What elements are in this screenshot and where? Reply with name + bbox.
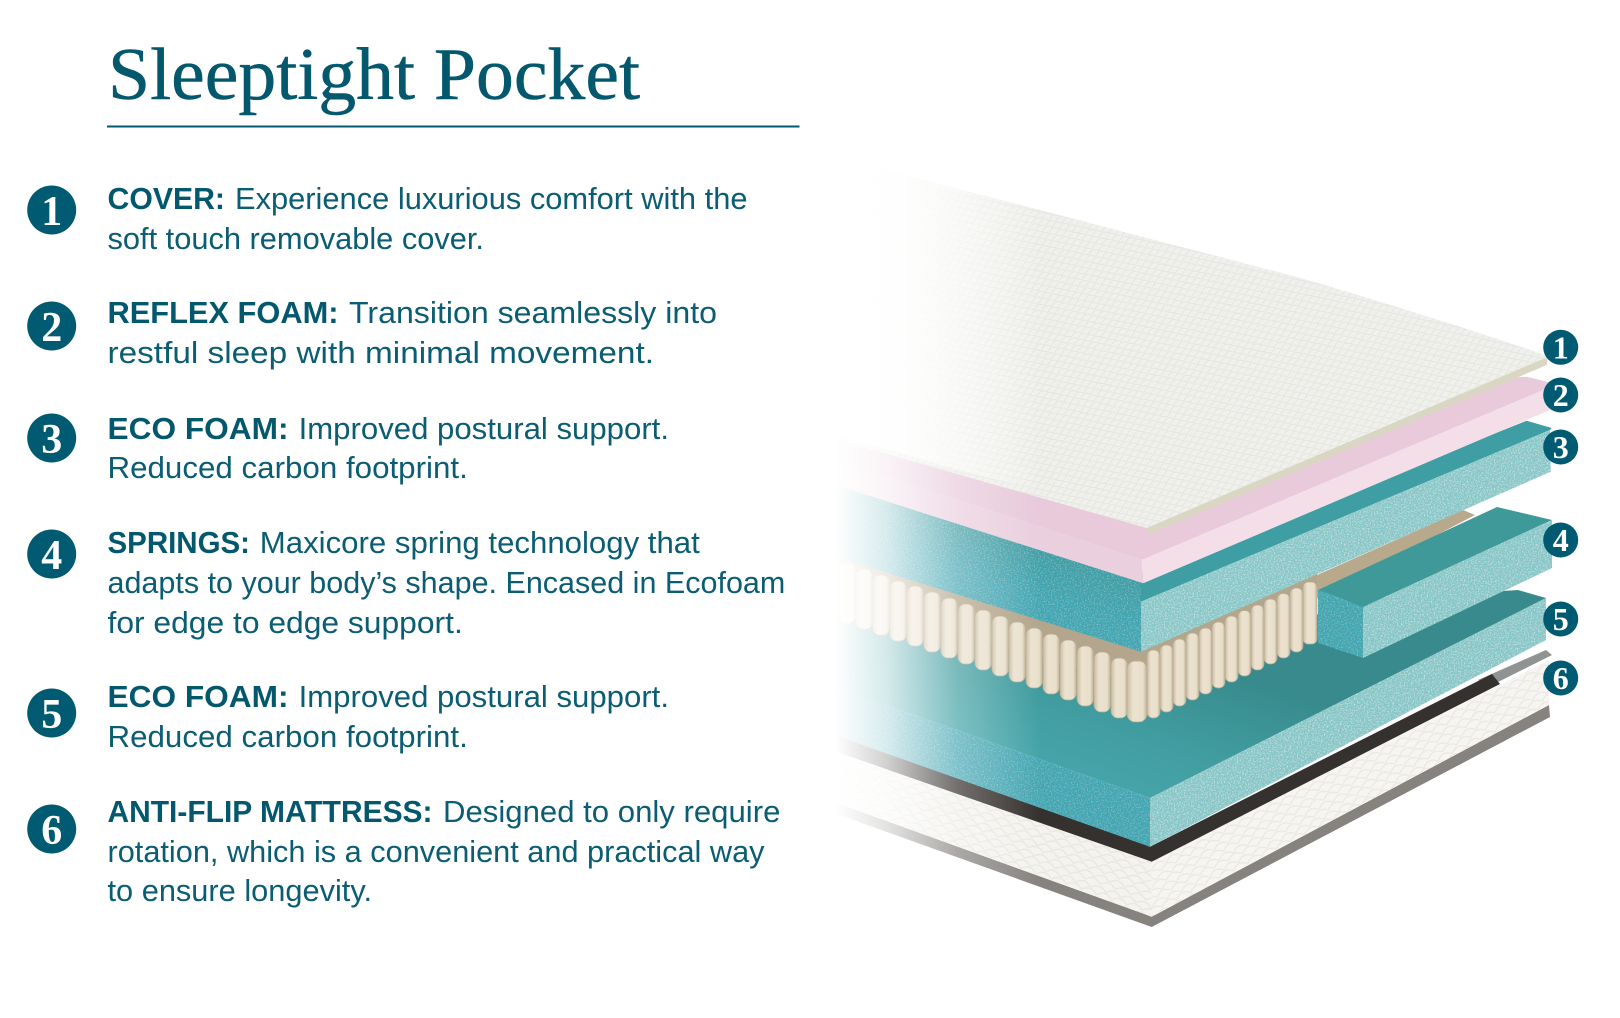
item 3: eco foam: Reduced carbon footprint. [108,450,468,485]
item 6: anti-flip mattress: 6 [41,808,62,854]
layer number badges: 2 [1553,377,1569,413]
item 4: springs: Maxicore spring technology that [260,525,700,560]
layer 3: eco foam [820,421,1552,652]
item 4: springs: 4 [41,533,62,579]
layer number badges: 3 [1553,429,1569,465]
item 3: eco foam: Improved postural support. [299,411,669,446]
item 4: springs: for edge to edge support. [108,605,463,640]
item 4: springs: SPRINGS: [108,525,250,560]
item 2: reflex foam: REFLEX FOAM: [108,295,338,330]
item 2: reflex foam [27,295,717,370]
item 5: eco foam: Reduced carbon footprint. [108,719,468,754]
item 6: anti-flip mattress: to ensure longevity. [108,873,372,908]
left edge white fade [790,130,1040,940]
item 4: springs: adapts to your body’s shape. Encased in Ecofoam [108,565,785,600]
layer 5: eco foam [820,590,1546,847]
item 2: reflex foam: Transition seamlessly into [349,295,717,330]
item 1: cover: 1 [41,189,62,235]
item 6: anti-flip mattress: ANTI-FLIP MATTRESS: [108,794,432,829]
layer number badges: 6 [1553,660,1569,696]
item 1: cover: Experience luxurious comfort with the [235,181,748,216]
item 5: eco foam [27,679,669,754]
layer 6: anti-flip base [820,650,1552,927]
mattress cross-section illustration [790,130,1552,940]
item 5: eco foam: 5 [41,692,62,738]
item 5: eco foam: ECO FOAM: [108,679,288,714]
layer number badges [1543,330,1578,696]
item 1: cover [27,181,747,256]
layer 4: pocket springs [820,510,1475,722]
item 1: cover: COVER: [108,181,225,216]
item 1: cover: soft touch removable cover. [108,221,484,256]
item 5: eco foam: Improved postural support. [299,679,669,714]
item 6: anti-flip mattress: Designed to only require [443,794,780,829]
layer number badges: 1 [1553,330,1569,366]
layer 1: cover [820,153,1548,534]
item 6: anti-flip mattress: rotation, which is a convenient and practical way [108,834,765,869]
item 2: reflex foam: restful sleep with minimal movement. [108,335,654,370]
title: Sleeptight Pocket [108,34,640,116]
item 6: anti-flip mattress [27,794,780,908]
item 4: springs [27,525,785,640]
item 3: eco foam [27,411,669,485]
item 3: eco foam: ECO FOAM: [108,411,288,446]
layer number badges: 4 [1553,522,1569,558]
layer number badges: 5 [1553,601,1569,637]
layer 2: reflex foam [820,377,1550,583]
layer 4: foam encasement block [1318,507,1552,658]
item 3: eco foam: 3 [41,417,62,463]
item 2: reflex foam: 2 [41,305,62,351]
